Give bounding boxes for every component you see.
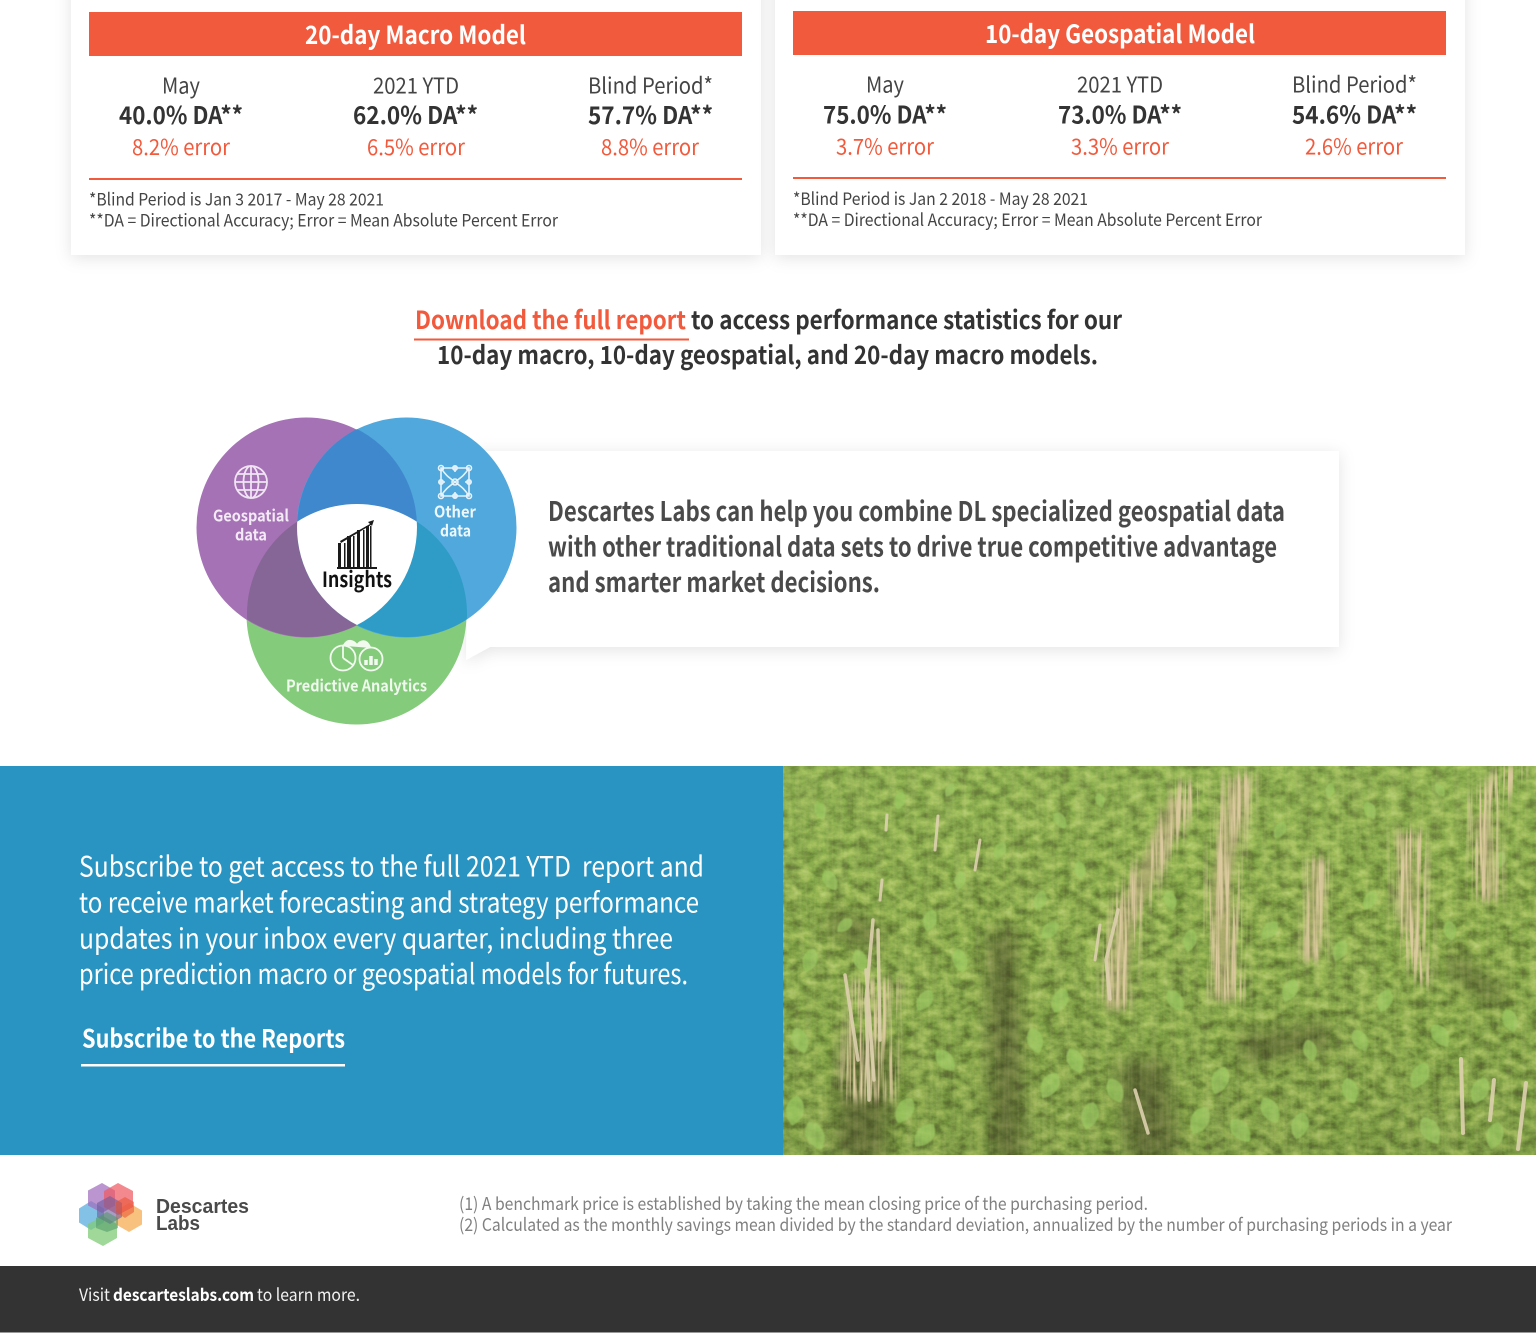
footer text: to learn more. — [257, 1281, 360, 1306]
icon: globe — [235, 466, 267, 498]
footnotes: **DA = Directional Accuracy; Error = Mean Absolute Percent Error — [793, 206, 1262, 231]
stat: Blind Period: Blind Period* — [588, 68, 713, 100]
stat: May: 40.0% DA** — [119, 96, 243, 131]
stat: 2021 YTD — [1058, 68, 1182, 162]
stat: 2021 YTD: 2021 YTD — [373, 68, 459, 100]
leaf clusters — [783, 782, 1521, 1153]
stat: May: 8.2% error — [132, 130, 230, 162]
card background — [71, 0, 761, 255]
subscribe text: Subscribe to get access to the full 2021 YTD report and — [79, 846, 704, 886]
heading: 10-day Geospatial Model — [793, 11, 1446, 55]
footnotes: **DA = Directional Accuracy; Error = Mean Absolute Percent Error — [89, 206, 558, 232]
label: Geospatial data — [213, 502, 289, 546]
footnotes: benchmark and calculation: (2) Calculated as the monthly savings mean divided by the standard deviation, annualized by the number of purchasing periods in a year — [459, 1212, 1452, 1237]
heading: 10-day Geospatial Model: 10-day Geospatial Model — [985, 15, 1255, 51]
footnotes: *Blind Period is Jan 2 2018 - May 28 2021 — [793, 185, 1088, 210]
soil rows — [830, 920, 1500, 1160]
footnotes: benchmark and calculation — [459, 1191, 1452, 1237]
stat: Blind Period — [588, 68, 713, 162]
logo wordmark: Labs — [156, 1213, 200, 1235]
panel: subscribe — [0, 766, 783, 1155]
footer bar — [0, 1266, 1536, 1332]
stat: 2021 YTD: 73.0% DA** — [1058, 96, 1182, 130]
footnotes — [89, 186, 558, 232]
link: Subscribe to the Reports: Subscribe to the Reports — [82, 1020, 345, 1056]
heading: 20-day Macro Model — [89, 12, 742, 56]
photo: soybean field with corn stubble — [783, 766, 1536, 1160]
stat: 2021 YTD: 2021 YTD — [1077, 68, 1163, 100]
tan straw bands — [1115, 780, 1490, 1010]
stat: 2021 YTD — [353, 68, 478, 162]
label: Insights: Insights — [322, 564, 392, 594]
callout text: and smarter market decisions. — [548, 561, 880, 600]
label: Geospatial data: Geospatial — [213, 502, 289, 526]
icon: binoculars with charts — [330, 641, 382, 670]
subscribe text: updates in your inbox every quarter, including three — [79, 918, 673, 958]
stat: May — [823, 68, 947, 162]
callout text — [548, 490, 1285, 600]
stat: May: 3.7% error — [836, 130, 934, 162]
logo: Descartes Labs — [79, 1183, 249, 1246]
callout text: with other traditional data sets to drive true competitive advantage — [548, 526, 1277, 564]
footnotes — [793, 185, 1262, 231]
stat: 2021 YTD: 62.0% DA** — [353, 96, 478, 131]
stat: May — [119, 68, 243, 162]
subscribe text: to receive market forecasting and strategy performance — [79, 882, 699, 922]
stat: Blind Period: 2.6% error — [1305, 130, 1403, 162]
stat: Blind Period: 8.8% error — [601, 130, 699, 162]
stat: Blind Period: 57.7% DA** — [588, 96, 713, 131]
stat: 2021 YTD: 3.3% error — [1071, 130, 1169, 162]
venn diagram — [196, 417, 517, 724]
call to action: download the full report: 10-day macro, 10-day geospatial, and 20-day macro models. — [437, 336, 1098, 372]
label: Other data: Other — [434, 498, 476, 522]
label: Predictive Analytics: Predictive Analytics — [286, 672, 427, 696]
muted colour wash — [783, 766, 1536, 1155]
call to action: download the full report — [414, 301, 1122, 372]
call to action: download the full report: Download the full report — [415, 301, 686, 337]
stat: Blind Period: Blind Period* — [1292, 68, 1417, 100]
footnotes: *Blind Period is Jan 3 2017 - May 28 2021 — [89, 186, 384, 210]
call to action: download the full report: to access performance statistics for our — [691, 301, 1122, 337]
corn stubble and straw — [845, 815, 1526, 1149]
callout panel: combine data — [466, 451, 1339, 660]
stat: Blind Period: 54.6% DA** — [1292, 96, 1417, 130]
logo wordmark — [156, 1196, 249, 1235]
footer text — [79, 1281, 360, 1306]
subscribe text — [79, 846, 704, 993]
card background — [775, 0, 1465, 255]
panel: 10-day geospatial model — [775, 0, 1465, 255]
stat: Blind Period — [1292, 68, 1417, 162]
stat: May: 75.0% DA** — [823, 96, 947, 130]
label: Geospatial data: data — [235, 522, 267, 546]
stat: May: May — [162, 68, 200, 100]
icon: rising bar chart — [337, 520, 377, 569]
stat: May: May — [866, 68, 904, 100]
subscribe text: price prediction macro or geospatial models for futures. — [79, 953, 688, 993]
callout text: Descartes Labs can help you combine DL specialized geospatial data — [548, 490, 1285, 529]
footnotes: benchmark and calculation: (1) A benchmark price is established by taking the mean closing price of the purchasing period. — [459, 1191, 1148, 1216]
icon: other data network — [438, 466, 472, 498]
label: Other data: data — [440, 518, 471, 542]
panel: 20-day macro model — [71, 0, 761, 255]
logo mark — [79, 1183, 142, 1246]
footer text: descarteslabs.com — [113, 1281, 254, 1306]
heading: 20-day Macro Model: 20-day Macro Model — [305, 16, 526, 52]
footer text: Visit — [79, 1281, 111, 1306]
label: Other data — [434, 498, 476, 542]
logo wordmark: Descartes — [156, 1196, 249, 1218]
stat: 2021 YTD: 6.5% error — [367, 130, 465, 162]
dense straw streaks — [783, 766, 1536, 1155]
